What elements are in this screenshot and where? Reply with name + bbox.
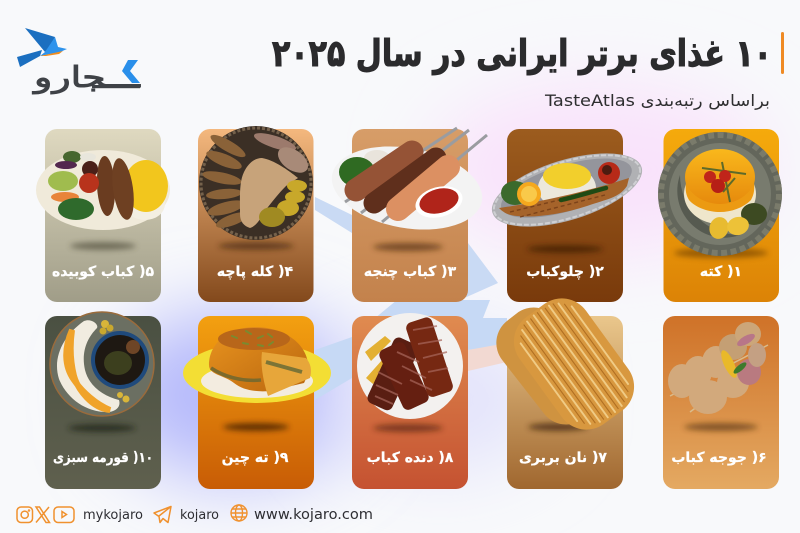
food: ribs plate [357, 313, 463, 419]
label: ۴( کله پاچه [217, 264, 294, 280]
food: barbari bread [485, 287, 646, 441]
label: ۹( ته چین [222, 450, 289, 466]
label: ۶( جوجه کباب [671, 450, 767, 466]
card 4: kaleh pacheh [198, 126, 314, 302]
footer: social links [17, 505, 373, 523]
food: chelo kabab platter [484, 139, 650, 241]
icon: X [36, 507, 50, 522]
label: ۱( کته [700, 264, 742, 280]
card 6: joojeh kabab [663, 316, 779, 489]
handle: kojaro: kojaro [180, 508, 219, 523]
card 1: kateh [658, 129, 782, 302]
icon: globe [231, 505, 247, 521]
label: ۸( دنده کباب [367, 450, 454, 466]
card 9: tahchin [183, 316, 331, 489]
food: tahchin on yellow plate [183, 327, 331, 403]
label: ۱۰( قورمه سبزی [53, 450, 153, 466]
label: ۷( نان بربری [519, 450, 607, 466]
card 8: rib kabab [352, 313, 468, 489]
label: ۲( چلوکباب [526, 264, 604, 280]
title accent bar [781, 32, 784, 74]
food: koobideh plate [36, 150, 170, 230]
card 10: ghormeh sabzi [45, 312, 161, 489]
label: ۳( کباب چنجه [364, 264, 457, 280]
wordmark: ـــجارو [31, 60, 141, 94]
label: ۵( کباب کوبیده [52, 264, 155, 280]
icon: youtube [54, 507, 74, 522]
website: www.kojaro.com [254, 507, 373, 523]
card 5: kabab koobideh [36, 129, 170, 302]
food: ghormeh sabzi plate [50, 312, 154, 416]
food: chenjeh plate [325, 128, 489, 241]
logo: Kojaro [17, 28, 141, 94]
food: joojeh skewers [668, 322, 768, 414]
handle: mykojaro: mykojaro [83, 508, 143, 523]
icon: swallow bird [17, 28, 67, 67]
card 7: barbari bread [485, 287, 646, 489]
card 2: chelo kabab [484, 129, 650, 302]
card 3: kabab chenjeh [325, 128, 489, 302]
icon: telegram [154, 506, 171, 522]
icon: instagram [17, 507, 32, 522]
food: kaleh pacheh plate [199, 126, 313, 240]
food: kateh plate [658, 132, 782, 256]
subtitle: براساس رتبه‌بندی TasteAtlas [544, 91, 770, 111]
